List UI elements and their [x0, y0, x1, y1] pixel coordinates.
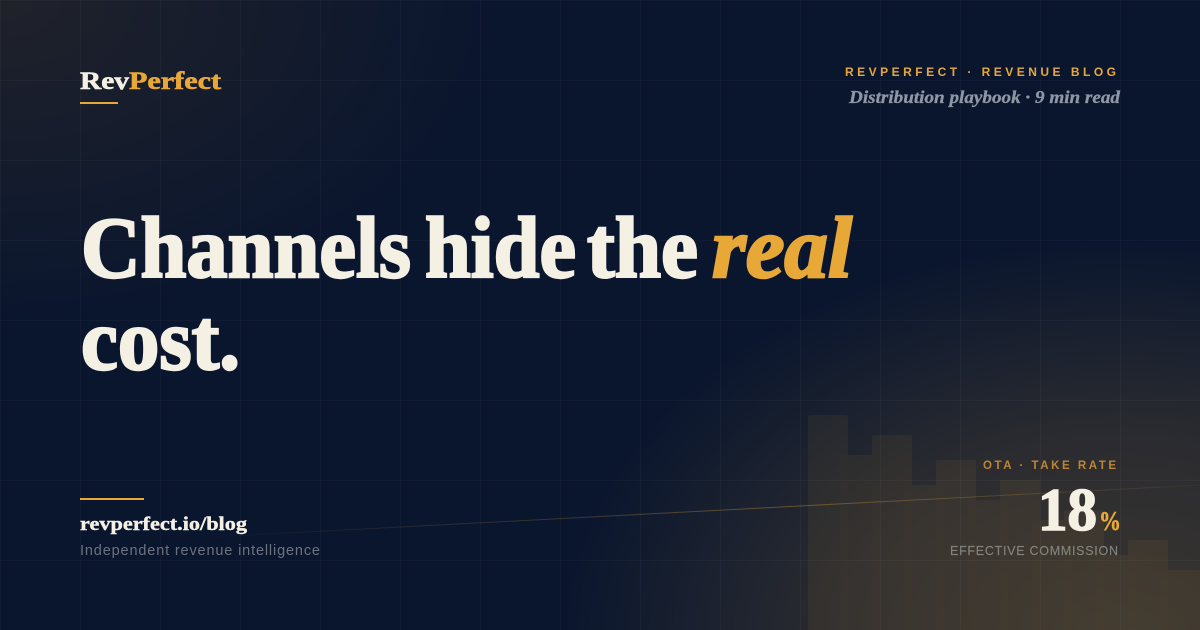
logo: Perfect — [129, 68, 222, 95]
headline: Channels — [81, 199, 411, 296]
headline — [81, 199, 853, 388]
stat percent sign: % — [1099, 506, 1121, 536]
eyebrow: publication: REVPERFECT · REVENUE BLOG — [845, 65, 1116, 79]
headline: cost. — [81, 291, 240, 388]
headline: the — [587, 199, 698, 296]
footer url: revperfect.io/blog — [80, 514, 248, 535]
headline: hide — [425, 199, 576, 296]
footer rule — [80, 498, 144, 500]
stat label: OTA · TAKE RATE — [983, 460, 1116, 472]
meta: reading time: Distribution playbook · 9 min read — [848, 87, 1120, 107]
logo underline — [80, 102, 118, 104]
stat caption: EFFECTIVE COMMISSION — [950, 544, 1118, 558]
logo: Rev — [80, 68, 130, 95]
bar chart: decorative commission bars — [808, 415, 1200, 630]
logo — [80, 68, 222, 95]
footer tagline: Independent revenue intelligence — [80, 543, 320, 559]
stat value: 18 — [1038, 477, 1097, 543]
stat: OTA take rate — [950, 460, 1121, 558]
headline accent word: real — [712, 199, 853, 296]
trend line — [0, 485, 1200, 548]
